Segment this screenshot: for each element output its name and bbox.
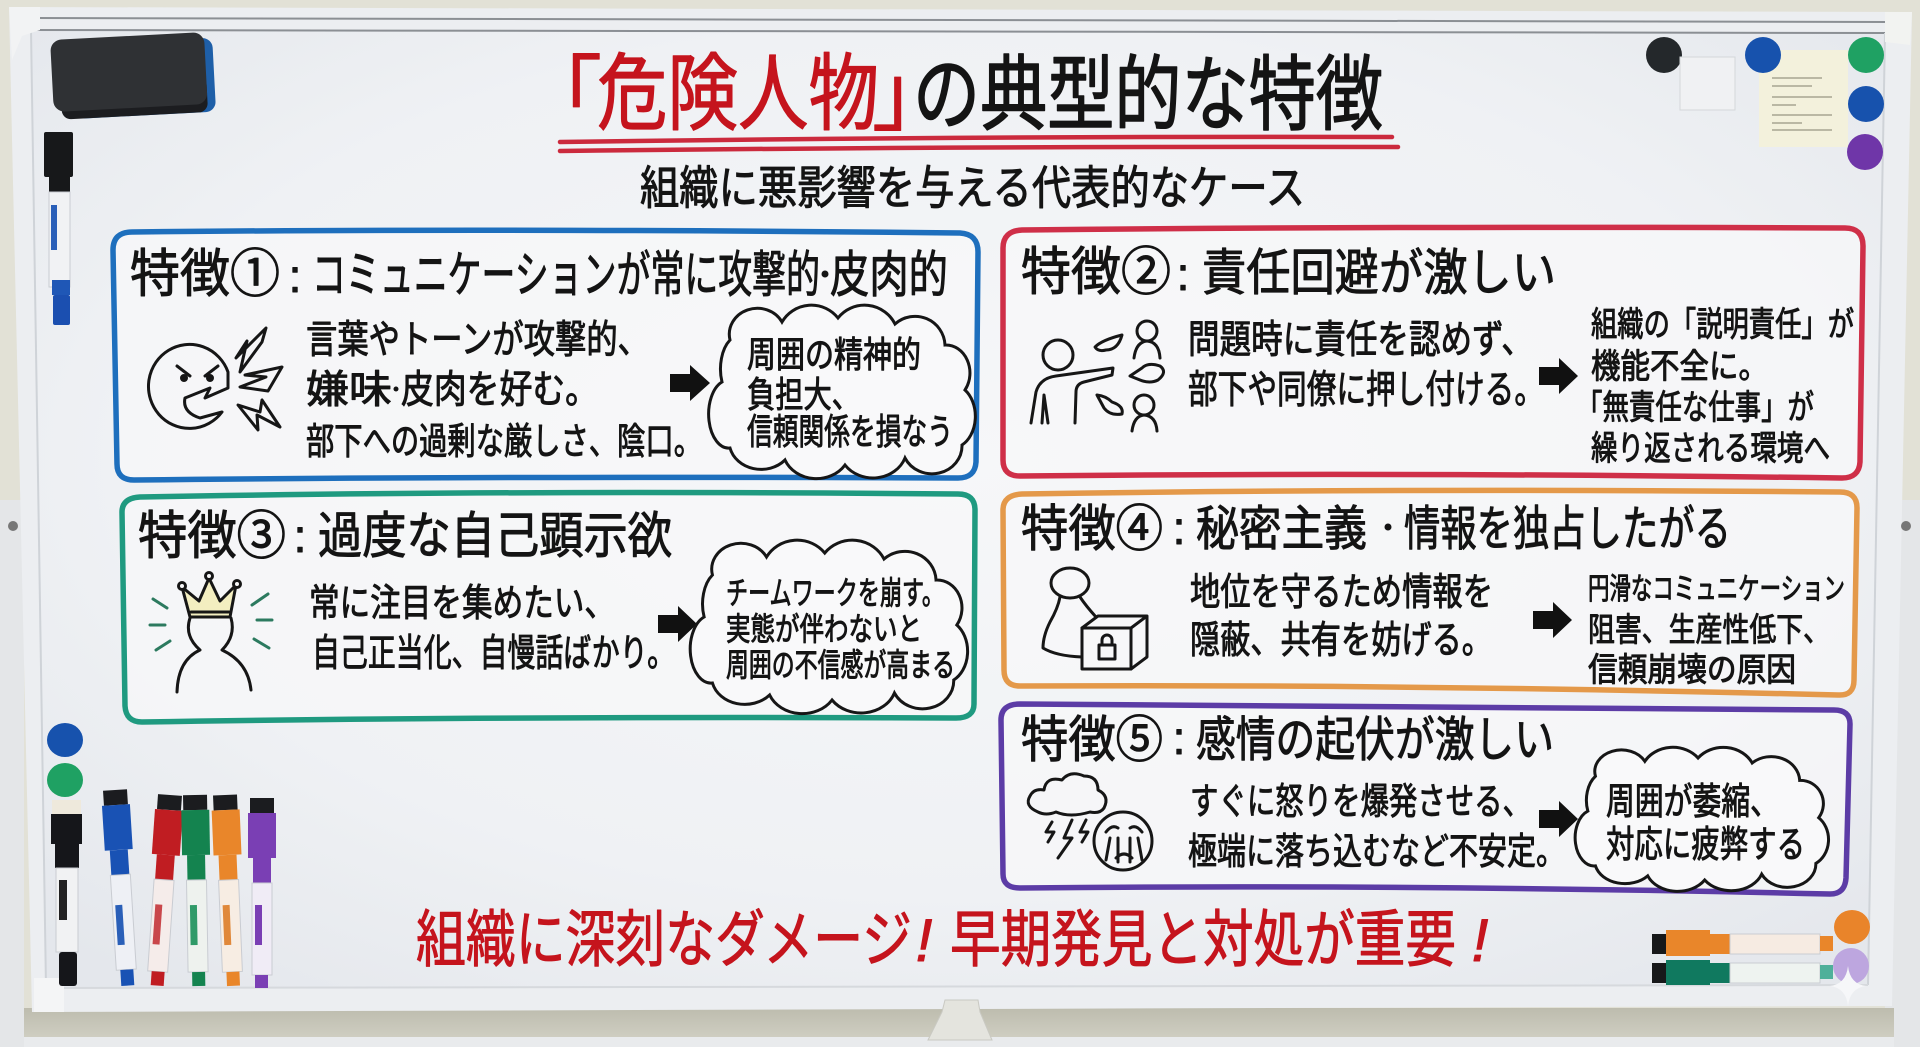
magnets upper right (1646, 37, 1884, 170)
heading: 情報を独占したがる (1404, 503, 1731, 556)
panel: feature 3 (122, 493, 975, 722)
icon: storm cloud and crying face (1028, 774, 1152, 870)
heading: 特徴① (130, 246, 280, 304)
title red part: 「 (520, 50, 602, 141)
heading: 感情の起伏が激しい (1196, 714, 1554, 767)
heading (1021, 501, 1731, 557)
body text: 言葉やトーンが攻撃的、 (306, 319, 649, 362)
marker: green horizontal (1652, 960, 1833, 985)
heading (1021, 244, 1556, 302)
footer message: 組織に深刻なダメージ (416, 906, 912, 975)
footer message: ! (1472, 907, 1489, 974)
heading: 秘密主義 (1196, 503, 1367, 556)
subtitle: 組織に悪影響を与える代表的なケース (640, 162, 1305, 214)
body text (1188, 319, 1544, 412)
cloud callout: 信頼関係を損なう (747, 411, 953, 452)
heading: 皮肉的 (830, 247, 948, 303)
footer message: ! (916, 907, 933, 974)
icon: person with locked box (1043, 568, 1147, 669)
icon: pointing person (1031, 321, 1164, 431)
heading: 過度な自己顕示欲 (318, 508, 672, 564)
footer message: 早期発見と対処が重要 (950, 906, 1456, 975)
marker: green (181, 795, 212, 986)
body text: 部下や同僚に押し付ける。 (1188, 369, 1544, 412)
body text: 嫌味 (306, 369, 392, 412)
marker: blue (101, 789, 141, 986)
icon: crowned person (150, 572, 272, 692)
heading: 特徴② (1021, 244, 1171, 302)
heading: 特徴④ (1021, 501, 1163, 557)
panel: feature 4 (1003, 490, 1857, 695)
cloud callout: 周囲の不信感が高まる (726, 647, 955, 683)
body text: 皮肉を好む。 (401, 369, 598, 412)
result text (1588, 573, 1845, 688)
marker: orange (211, 794, 247, 986)
body text (1188, 781, 1565, 872)
heading (1021, 712, 1554, 768)
body text: すぐに怒りを爆発させる、 (1190, 781, 1531, 822)
heading: コミュニケーションが常に攻撃的 (312, 247, 820, 303)
marker: purple (248, 798, 276, 988)
marker: orange horizontal (1652, 930, 1833, 956)
heading: 特徴⑤ (1021, 712, 1163, 768)
heading: 特徴③ (138, 508, 286, 566)
title underline (560, 137, 1398, 151)
panel: feature 2 (1003, 227, 1863, 478)
cloud callout (709, 305, 975, 479)
title red part: 危険人物 (597, 47, 879, 141)
result text: 機能不全に。 (1591, 348, 1768, 386)
cloud callout: 周囲が萎縮、 (1606, 781, 1779, 822)
heading: : (1173, 502, 1185, 554)
title red part: 」 (872, 50, 954, 141)
body text (306, 319, 702, 462)
heading (138, 508, 672, 566)
icon: angry face (148, 328, 282, 430)
title black part: の典型的な特徴 (913, 50, 1383, 141)
tray clip (928, 1000, 992, 1040)
magnets lower left (47, 723, 83, 797)
marker: blue upper left (44, 132, 73, 325)
markers lower left (51, 789, 276, 988)
heading (130, 246, 948, 304)
arrow (1539, 358, 1578, 394)
panel: feature 5 (1001, 704, 1850, 894)
heading: : (1173, 712, 1185, 764)
marker: red (143, 794, 184, 987)
heading: : (1177, 248, 1189, 300)
body text: 極端に落ち込むなど不安定。 (1188, 831, 1565, 872)
arrow (670, 365, 710, 401)
marker: black (51, 800, 82, 986)
cloud callout: 周囲の精神的 (747, 334, 921, 375)
cloud callout: 実態が伴わないと (726, 611, 922, 647)
result text: 信頼崩壊の原因 (1588, 651, 1796, 688)
footer message (416, 906, 1489, 975)
arrow (658, 606, 697, 642)
body text (1190, 572, 1493, 662)
cloud callout: チームワークを崩す。 (726, 575, 944, 611)
result text (1576, 306, 1854, 468)
result text: 阻害、生産性低下、 (1588, 611, 1830, 648)
body text: 問題時に責任を認めず、 (1188, 319, 1533, 362)
heading: 責任回避が激しい (1202, 245, 1556, 301)
body text: 部下への過剰な厳しさ、陰口。 (306, 421, 702, 462)
arrow (1539, 801, 1578, 837)
cloud callout (690, 540, 968, 714)
result text: 繰り返される環境へ (1591, 430, 1830, 468)
markers and magnets lower right (1652, 910, 1870, 1006)
result text: 「無責任な仕事」が (1576, 389, 1814, 427)
eraser (50, 32, 216, 120)
title (520, 47, 1383, 141)
cloud callout: 負担大、 (747, 374, 860, 415)
heading: : (294, 510, 306, 562)
arrow (1533, 602, 1572, 638)
body text (309, 583, 675, 675)
body text: 常に注目を集めたい、 (309, 583, 615, 625)
body text: 地位を守るため情報を (1190, 572, 1493, 614)
panel: feature 1 (113, 230, 978, 480)
heading: : (289, 250, 301, 302)
body text: 自己正当化、自慢話ばかり。 (312, 633, 675, 675)
cloud callout: 対応に疲弊する (1606, 824, 1805, 865)
cloud callout (1575, 747, 1829, 891)
body text: 隠蔽、共有を妨げる。 (1190, 620, 1492, 662)
